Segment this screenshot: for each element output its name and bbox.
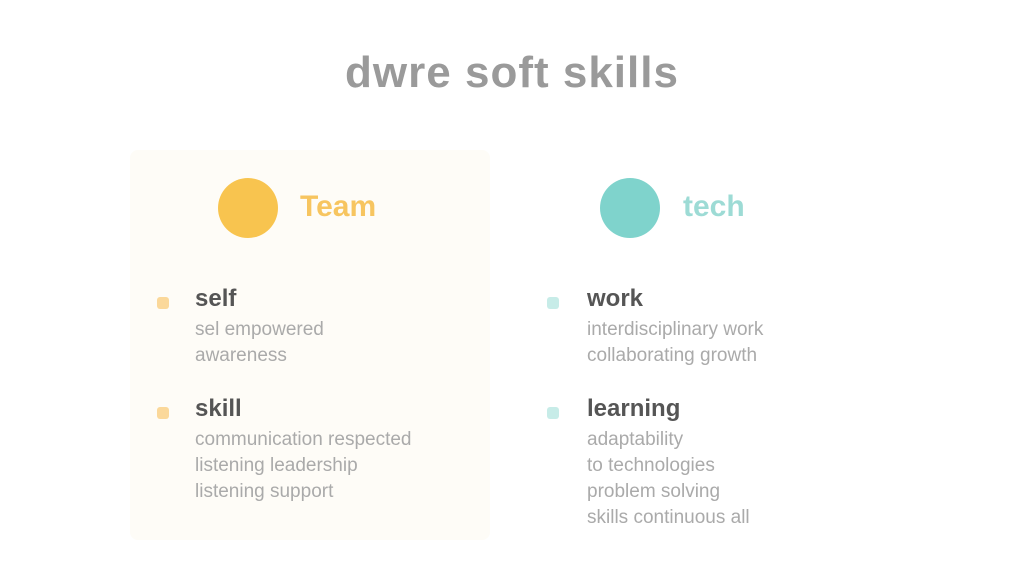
title: dwre soft skills: [345, 48, 679, 97]
tech bullet 2: to technologies: [587, 455, 715, 476]
tech bullet 1: interdisciplinary work: [587, 319, 763, 340]
team bullet 1: self: [195, 285, 236, 312]
tech bullet 2: adaptability: [587, 429, 683, 450]
tech label: tech: [683, 190, 745, 223]
team bullet 2: listening leadership: [195, 455, 358, 476]
team label: Team: [300, 190, 376, 223]
team bullet 2: skill: [195, 395, 242, 422]
tech bullet 2: [547, 395, 750, 528]
team bullet 2: communication respected: [195, 429, 412, 450]
icon: team circle: [218, 178, 278, 238]
tech bullet 2: problem solving: [587, 481, 720, 502]
team bullet 2: listening support: [195, 481, 333, 502]
tech bullet 1: [547, 285, 764, 366]
tech bullet 1: collaborating growth: [587, 345, 757, 366]
team bullet 1: sel empowered: [195, 319, 324, 340]
tech bullet 1: work: [587, 285, 643, 312]
icon: tech circle: [600, 178, 660, 238]
panel: team: [130, 150, 490, 540]
team bullet 1: [157, 285, 324, 366]
team bullet 1: awareness: [195, 345, 287, 366]
tech bullet 2: learning: [587, 395, 680, 422]
tech bullet 2: skills continuous all: [587, 507, 750, 528]
team bullet 2: [157, 395, 412, 502]
